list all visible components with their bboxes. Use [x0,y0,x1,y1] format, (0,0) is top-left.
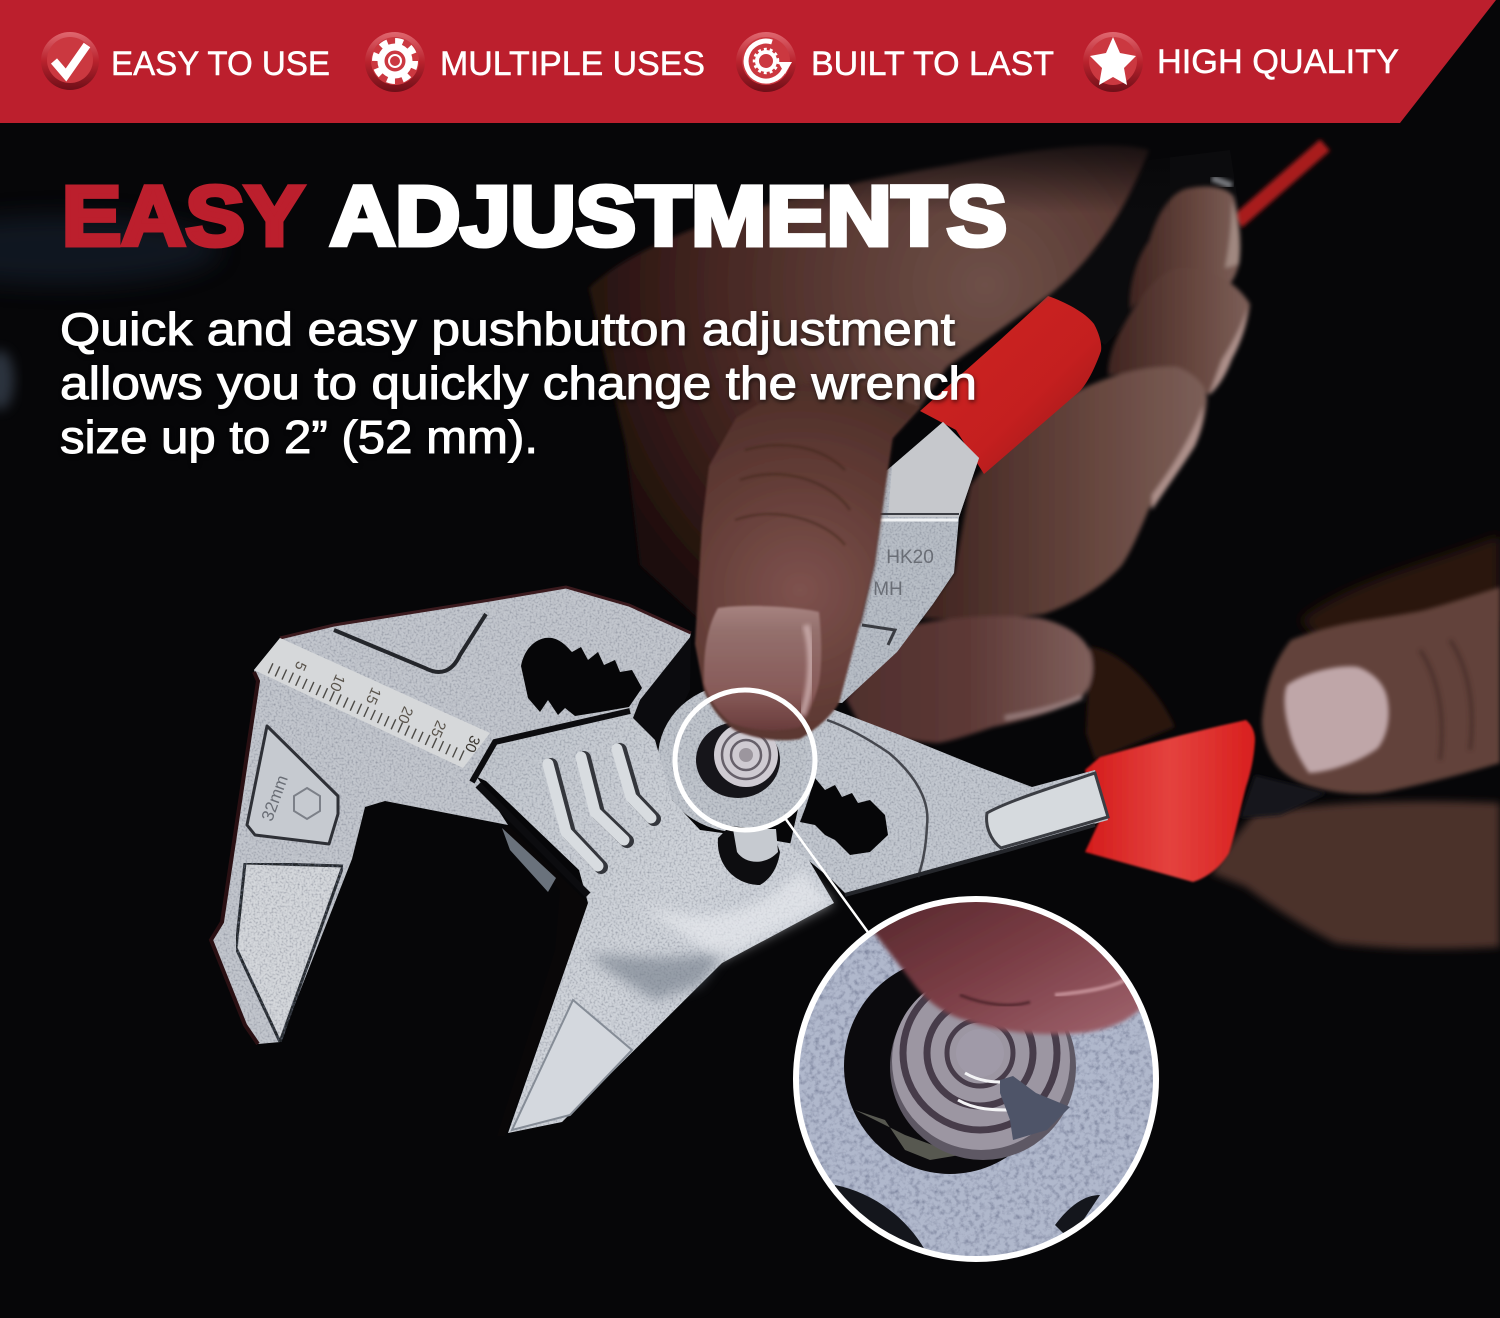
ruler scale: 20 [394,704,416,726]
upper handle grip [1040,145,1325,345]
pivot ring plate [658,684,818,832]
detail ring [675,690,815,830]
dark gap beside pivot plate [633,636,691,795]
movable jaw [477,714,834,1133]
label: easy to use: EASY TO USE [111,45,330,83]
ruler scale: 10 [326,672,348,694]
hole two [800,778,888,855]
icon: star [1083,32,1143,92]
ruler scale [254,638,490,768]
lower facet of fixed jaw [236,863,343,1042]
description text: size up to 2” (52 mm). [60,411,538,463]
jaw ribs [548,749,654,867]
label: high quality: HIGH QUALITY [1157,43,1399,81]
right hand [1211,535,1500,949]
lower red sleeve [1085,720,1255,882]
dark socket [844,968,1008,1174]
upper hand: fingers [846,186,1250,760]
inset magnified button [790,885,1165,1265]
adjustment button [696,722,780,798]
bottom cut-outs [835,1185,1100,1248]
hole one [521,638,642,716]
description text [60,303,977,463]
pressing thumb [695,380,920,798]
fingertip [872,902,1140,1036]
pivot slot and tab [718,826,780,885]
background haze [0,215,220,410]
icon: check mark [41,32,99,90]
size badge [247,726,338,844]
metal texture [799,936,1153,1256]
title: EASY [62,169,304,263]
jaw opening slot [497,825,590,1136]
banner [0,0,1496,123]
icon: built to last cycle [736,32,796,92]
upper jaw and fixed jaw [211,587,691,1044]
thumbnail [704,606,821,730]
ruler scale: 5 [291,659,310,673]
upper hand: palm [570,124,1170,624]
label: built to last: BUILT TO LAST [811,45,1054,83]
description text: Quick and easy pushbutton adjustment [60,303,955,355]
title [62,169,1007,263]
label: multiple uses: MULTIPLE USES [440,45,705,83]
ruler scale: 15 [362,685,384,707]
title: ADJUSTMENTS [330,169,1007,263]
leader line [785,818,870,935]
ruler scale: 25 [427,718,449,740]
icon: gear [365,32,425,92]
wrench: body [211,587,1108,1136]
upper handle sleeve and steel arm: HK20 [886,547,934,568]
description text: allows you to quickly change the wrench [60,357,977,409]
upper handle sleeve and steel arm [800,296,1101,703]
upper handle sleeve and steel arm: MH [873,579,903,600]
size badge: 32mm [258,773,292,824]
button rings [890,992,1076,1160]
upper jaw groove [334,614,486,672]
ruler scale: 30 [461,733,483,755]
lower handle [790,707,1108,893]
